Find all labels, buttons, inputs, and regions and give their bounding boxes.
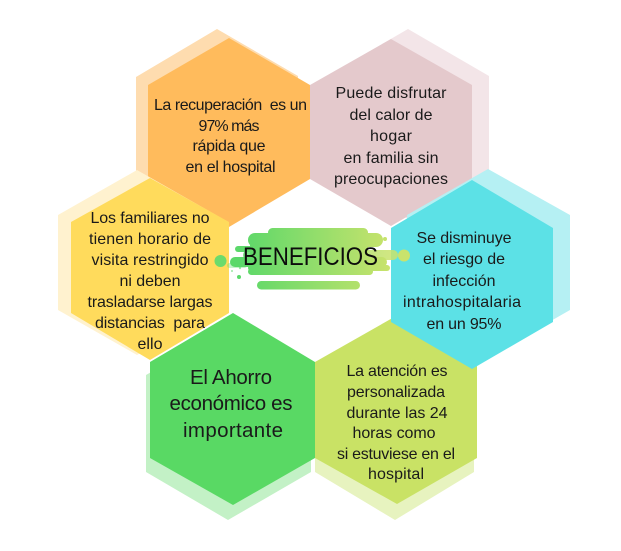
text: family visits: ello xyxy=(138,336,163,353)
hexagon shadow: lime xyxy=(315,330,474,520)
hexagon: yellow xyxy=(71,178,229,360)
text: lower infection: infección xyxy=(432,273,496,290)
hexagon shadow: yellow xyxy=(58,170,216,355)
text: family visits: tienen horario de xyxy=(89,231,211,248)
text: home warmth: Puede disfrutar xyxy=(336,85,447,102)
text: family visits: Los familiares no xyxy=(90,210,210,227)
text: home warmth: hogar xyxy=(370,128,413,145)
text: personalized care: personalizada xyxy=(347,384,445,401)
panel: personalized care xyxy=(315,316,477,520)
hexagon shadow: pink xyxy=(327,29,489,219)
text: family visits: ni deben xyxy=(120,273,180,290)
text: economic savings: económico es xyxy=(170,392,292,415)
panel: faster recovery xyxy=(136,29,310,227)
text: lower infection: intrahospitalaria xyxy=(403,294,521,311)
text: lower infection xyxy=(403,230,521,333)
text: family visits: visita restringido xyxy=(92,252,209,269)
hexagon: orange xyxy=(148,38,310,227)
text: home warmth xyxy=(334,85,448,188)
hexagon: green xyxy=(150,313,315,505)
text: home warmth: del calor de xyxy=(350,107,433,124)
panel: family visits xyxy=(58,170,229,360)
text: recovery xyxy=(154,97,307,176)
text: economic savings xyxy=(170,366,292,442)
text: recovery: La recuperación es un xyxy=(154,97,307,114)
text: family visits: distancias para xyxy=(95,315,205,332)
hexagon: lime xyxy=(315,316,477,504)
panel: home warmth xyxy=(310,29,489,226)
panel: economic savings xyxy=(146,313,315,520)
central brush shape xyxy=(227,228,398,290)
text: economic savings: importante xyxy=(183,419,283,442)
text: home warmth: en familia sin xyxy=(344,150,438,167)
hexagon: pink xyxy=(310,39,472,226)
text: personalized care xyxy=(337,363,455,483)
text: home warmth: preocupaciones xyxy=(334,171,448,188)
text: family visits xyxy=(88,210,212,353)
text: lower infection: el riesgo de xyxy=(423,251,505,268)
panel: lower infection xyxy=(391,169,570,369)
text: personalized care: La atención es xyxy=(346,363,448,380)
text: lower infection: en un 95% xyxy=(426,316,502,333)
text: personalized care: si estuviese en el xyxy=(337,446,455,463)
hexagon shadow: green xyxy=(146,328,311,520)
text: personalized care: hospital xyxy=(368,466,424,483)
text: recovery: rápida que xyxy=(192,138,266,155)
text: recovery: en el hospital xyxy=(186,159,276,176)
text: family visits: trasladarse largas xyxy=(88,294,212,311)
hexagon shadow: cyan xyxy=(407,169,570,357)
text: lower infection: Se disminuye xyxy=(416,230,512,247)
title: BENEFICIOS xyxy=(243,243,378,271)
connector dot: left xyxy=(214,255,226,267)
text: economic savings: El Ahorro xyxy=(190,366,272,389)
text: personalized care: horas como xyxy=(352,425,436,442)
hexagon shadow: orange xyxy=(136,29,298,219)
text: personalized care: durante las 24 xyxy=(346,405,448,422)
connector dot: right xyxy=(398,250,410,262)
hexagon: cyan xyxy=(391,180,553,369)
text: recovery: 97% más xyxy=(198,118,260,135)
